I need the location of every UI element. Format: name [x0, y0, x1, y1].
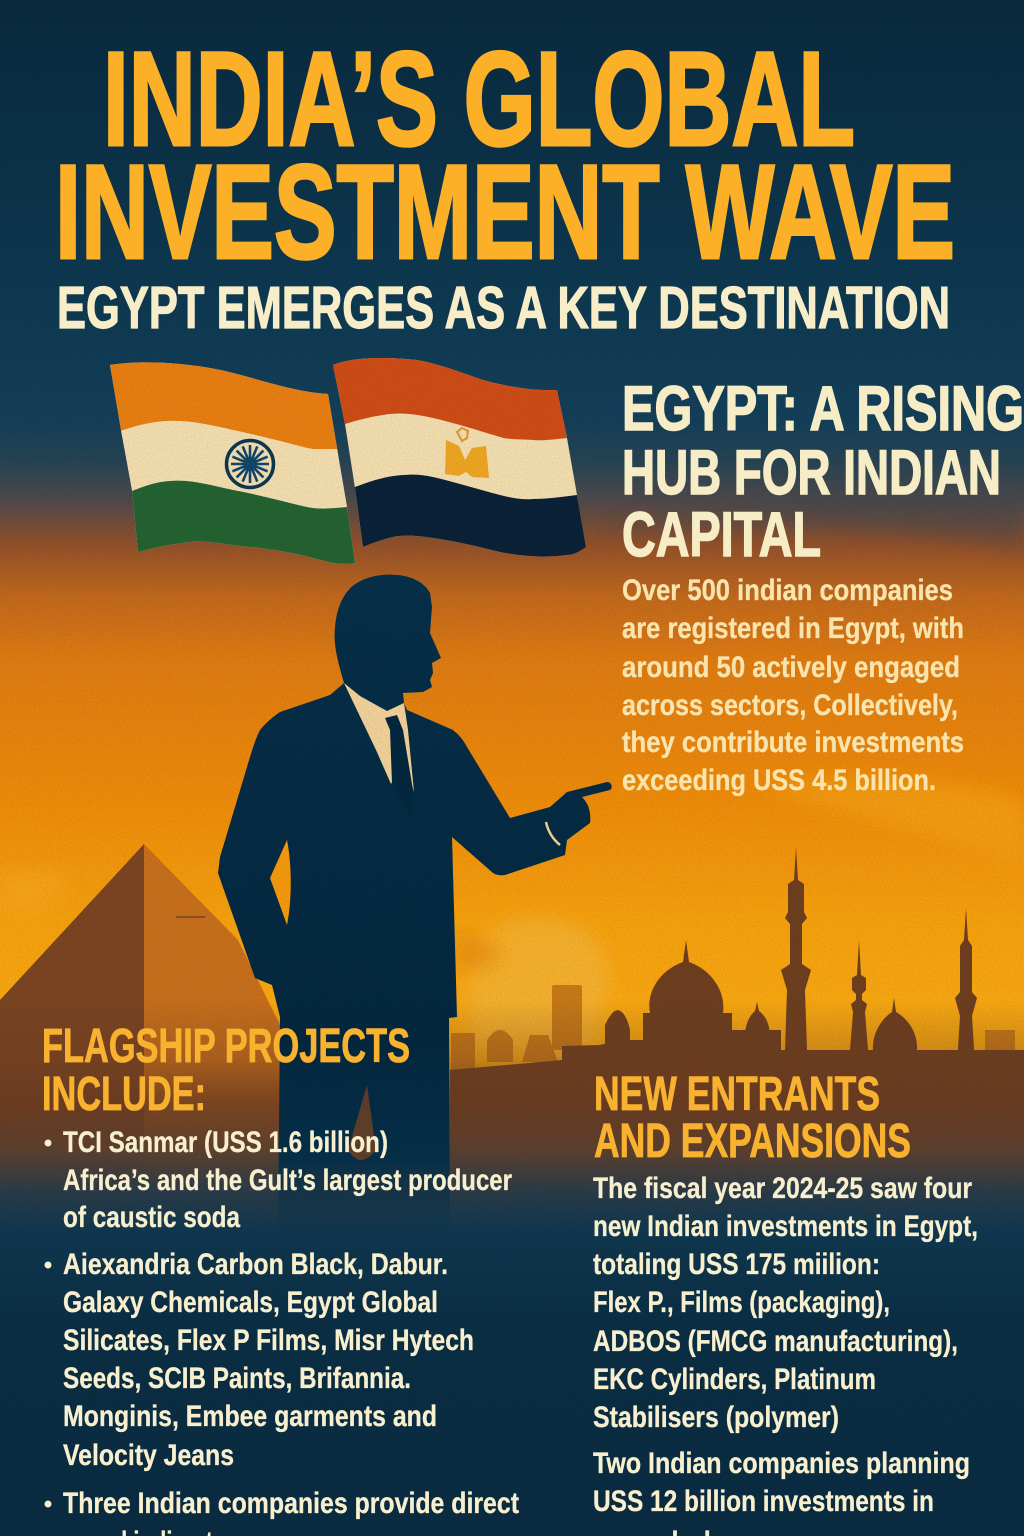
text block: Egypt hub details: across sectors, Collectively, [622, 689, 958, 722]
ashoka chakra [226, 440, 274, 488]
text block: new entrants details [593, 1172, 978, 1536]
text block: Egypt hub details: exceeding USS 4.5 billion. [622, 764, 936, 797]
distant buildings [451, 985, 1015, 1073]
list: flagship projects: Galaxy Chemicals, Egypt Global [63, 1286, 438, 1319]
tie [385, 715, 413, 817]
title [55, 25, 955, 287]
sunset clouds [0, 490, 1024, 1050]
heading: Egypt hub [622, 374, 1024, 570]
text block: new entrants details: USS 12 billion investments in [593, 1485, 934, 1518]
shirt [344, 683, 414, 792]
text block: Egypt hub details [622, 574, 964, 797]
text block: new entrants details: Stabilisers (polymer) [593, 1401, 839, 1434]
text block: Egypt hub details: Over 500 indian companies [622, 574, 953, 607]
list: flagship projects: TCI Sanmar (USS 1.6 billion) [63, 1126, 388, 1159]
illustration: city skyline with mosque [450, 847, 1024, 1220]
mosque, minarets and foreground mass [450, 847, 1024, 1220]
eagle emblem [445, 428, 489, 478]
heading: new entrants: NEW ENTRANTS [594, 1068, 880, 1121]
list: flagship projects: Monginis, Embee garments and [63, 1400, 437, 1433]
flag: India [110, 362, 355, 564]
businessman silhouette [218, 575, 612, 1240]
pocket gap [270, 840, 291, 925]
heading: new entrants [594, 1068, 911, 1168]
text block: new entrants details: totaling USS 175 miilion: [593, 1248, 880, 1281]
text block: Egypt hub details: are registered in Egypt, with [622, 612, 964, 645]
text block: new entrants details: EKC Cylinders, Platinum [593, 1363, 876, 1396]
list: flagship projects: Africa’s and the Gult’s largest producer [63, 1164, 512, 1197]
heading: Egypt hub: CAPITAL [622, 500, 821, 570]
illustration: pyramid [0, 844, 300, 1220]
heading: new entrants: AND EXPANSIONS [594, 1115, 911, 1168]
list: flagship projects: of caustic soda [63, 1201, 240, 1234]
text block: Egypt hub details: around 50 actively engaged [622, 651, 960, 684]
bottom fade into navy [0, 1000, 1024, 1536]
leg gap [348, 1085, 376, 1160]
list: flagship projects: Silicates, Flex P Films, Misr Hytech [63, 1324, 474, 1357]
heading: flagship projects [42, 1020, 410, 1121]
flag: Egypt [333, 358, 586, 556]
heading: flagship projects: INCLUDE: [42, 1068, 206, 1121]
list: flagship projects: Three Indian companies provide direct [63, 1487, 519, 1520]
list: flagship projects [44, 1126, 519, 1536]
list: flagship projects: Velocity Jeans [63, 1439, 234, 1472]
heading: flagship projects: FLAGSHIP PROJECTS [42, 1020, 410, 1073]
list: flagship projects: Aiexandria Carbon Black, Dabur. [63, 1248, 448, 1281]
text block: Egypt hub details: they contribute investments [622, 726, 964, 759]
list: flagship projects: Seeds, SCIB Paints, Brifannia. [63, 1362, 411, 1395]
text block: new entrants details: Flex P., Films (packaging), [593, 1286, 890, 1319]
shirt cuff [546, 822, 560, 845]
